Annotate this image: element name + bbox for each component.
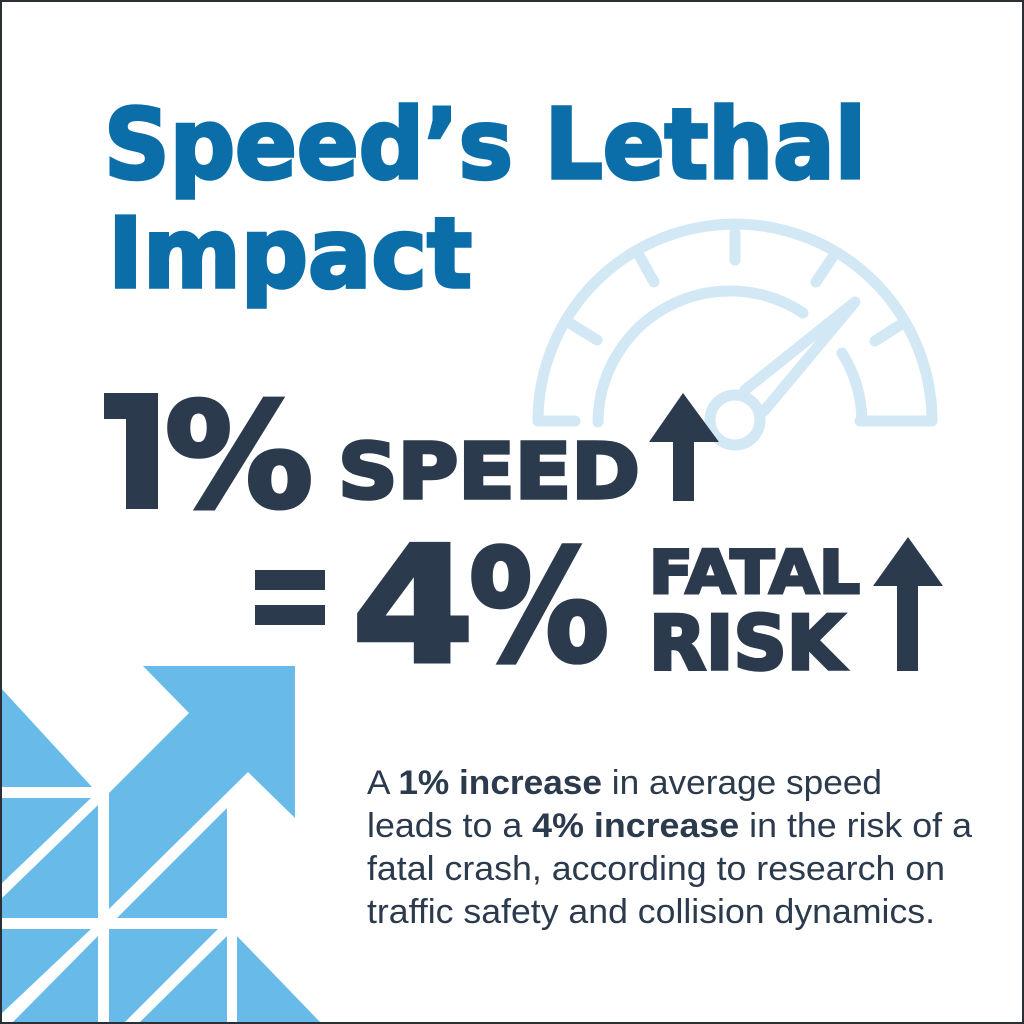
description text: fatal crash, according to research on bbox=[367, 850, 945, 888]
statistic: equals 4% fatal risk up: RISK bbox=[649, 599, 847, 687]
statistic: 1% speed up: % bbox=[165, 372, 313, 540]
statistic: equals 4% fatal risk up: 4 bbox=[352, 512, 474, 699]
decorative rising arrow with triangles bbox=[0, 666, 320, 1022]
title: Speed’s Lethal bbox=[104, 88, 866, 201]
statistic: equals 4% fatal risk up: FATAL bbox=[649, 538, 860, 608]
arrow: speed up bbox=[649, 393, 719, 501]
description text bbox=[367, 764, 972, 931]
statistic: 1% speed up: 1 bbox=[86, 362, 197, 547]
icon: speedometer gauge bbox=[538, 224, 932, 445]
arrow: fatal risk up bbox=[873, 537, 943, 671]
title bbox=[104, 88, 866, 310]
statistic: 1% speed up: SPEED bbox=[338, 428, 640, 517]
title: Impact bbox=[108, 197, 472, 310]
statistic: equals 4% fatal risk up: % bbox=[469, 518, 609, 697]
description text: leads to a 4% increase in the risk of a bbox=[367, 807, 972, 845]
description text: A 1% increase in average speed bbox=[367, 764, 882, 802]
statistic: 1% speed up bbox=[104, 393, 719, 510]
description text: traffic safety and collision dynamics. bbox=[367, 893, 935, 931]
statistic: equals 4% fatal risk up bbox=[255, 512, 943, 699]
